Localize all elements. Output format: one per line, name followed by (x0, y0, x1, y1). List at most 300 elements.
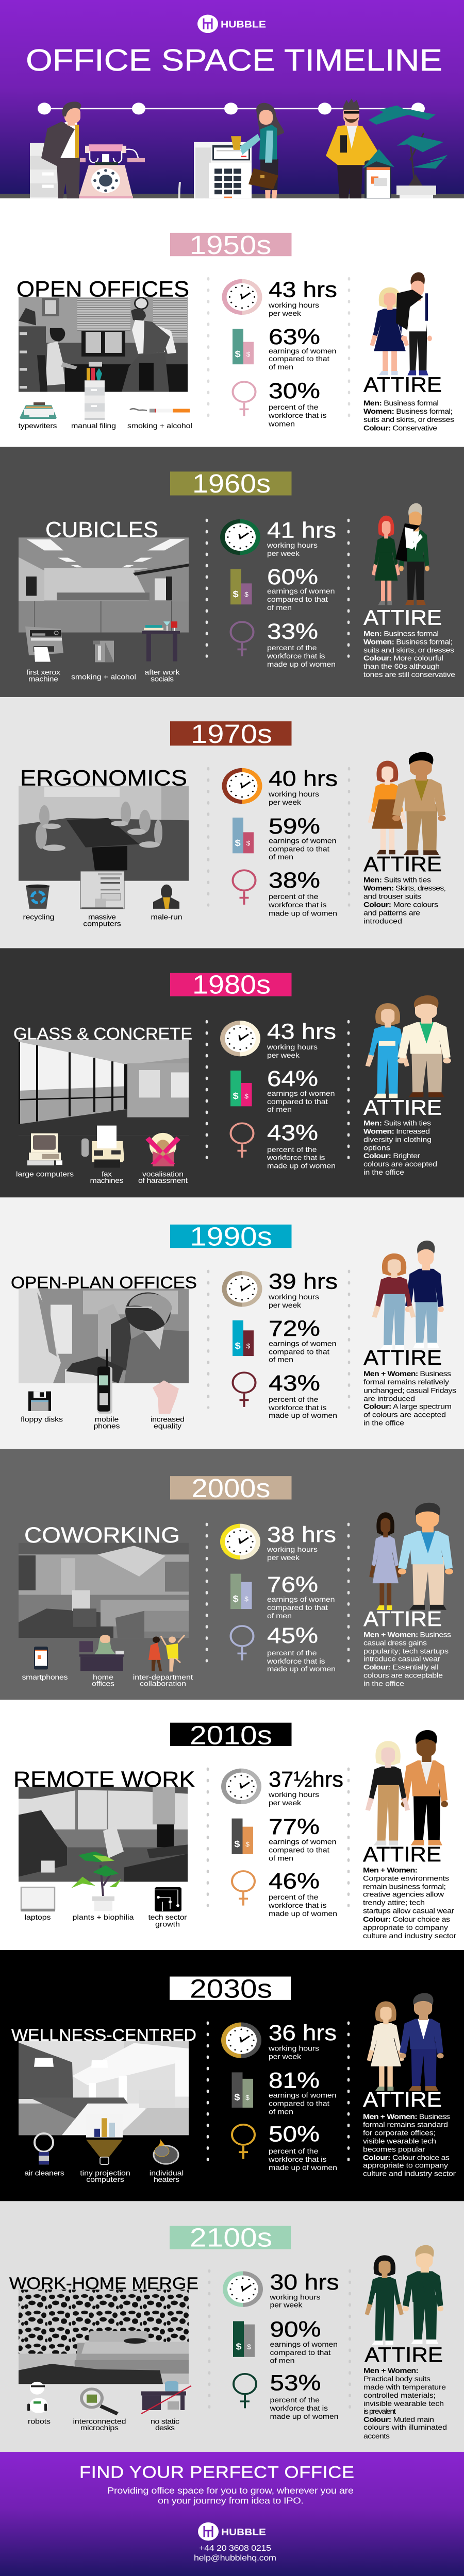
stat: earnings bar: earnings of women (269, 2091, 336, 2099)
divider dots (348, 768, 350, 906)
divider dots (207, 2022, 209, 2161)
stat: earnings bar: compared to that (269, 355, 330, 363)
stat: women in workforce: percent of the (269, 893, 319, 901)
stat: earnings bar: 59% (269, 814, 320, 838)
stat: earnings bar: of men (269, 363, 293, 371)
stat: earnings bar: 72% (269, 1316, 320, 1341)
icon with label: robot: robots (28, 2417, 51, 2426)
stat: women in workforce: 43% (267, 1121, 318, 1145)
heading: OPEN OFFICES (16, 277, 189, 301)
stat: women in workforce (233, 868, 337, 918)
decade badge: 1970s (170, 720, 292, 749)
icon with label: first xerox machine (25, 626, 63, 683)
stat: earnings bar: earnings of women (269, 347, 336, 355)
panel: footer (0, 2452, 464, 2576)
icon with label: circuit board: growth (155, 1920, 180, 1928)
attire description: Corporate environments (363, 1874, 449, 1883)
logo: Hubble: HUBBLE (221, 2527, 266, 2538)
icon with label: circuit board: tech sector (148, 1913, 187, 1922)
icon with label: recycling bin (23, 885, 54, 921)
attire description: visible wearable tech (363, 2137, 436, 2145)
stat: earnings bar (230, 565, 335, 612)
attire description: Men + Women: (363, 2367, 419, 2375)
stat: working hours: working hours (267, 541, 318, 550)
stat: working hours: working hours (268, 301, 319, 310)
attire description: in the office (363, 1680, 404, 1688)
panel: 1950s (0, 198, 464, 447)
stat: earnings bar: of men (267, 1612, 292, 1620)
attire description: are introduced (363, 1395, 415, 1403)
stat: earnings bar: $ (233, 1594, 239, 1604)
decade badge: 2100s (170, 2223, 291, 2252)
stat: women in workforce: made up of women (269, 1412, 337, 1420)
icon with label: laptop: laptops (25, 1913, 51, 1922)
decade badge: 2010s (170, 1721, 292, 1750)
stat: working hours (220, 1522, 336, 1562)
icon with label: tiny projection computer (80, 2114, 130, 2184)
stat: earnings bar: 76% (267, 1572, 318, 1597)
stat: women in workforce (234, 2370, 338, 2421)
attire description: and trouser suits (363, 892, 421, 901)
stat: women in workforce (232, 1869, 337, 1918)
photo: older man at a computer (19, 1289, 189, 1383)
stat: working hours: working hours (268, 1293, 319, 1301)
attire description (363, 2113, 456, 2178)
stat: earnings bar: earnings of women (269, 1838, 336, 1846)
stat: working hours: per week (270, 2301, 303, 2310)
stat: earnings bar: compared to that (269, 1846, 330, 1854)
stat: earnings bar: earnings of women (267, 1090, 335, 1098)
stat: women in workforce: made up of women (269, 909, 337, 918)
attire description: invisible wearable tech (363, 2400, 444, 2408)
stat: earnings bar: 63% (269, 324, 320, 349)
stat: earnings bar: $ (235, 838, 241, 849)
decade badge: 1970s: 1970s (191, 720, 272, 749)
stat: women in workforce: workforce that is (267, 1657, 325, 1666)
stat: women in workforce: made up of women (269, 1910, 337, 1918)
figures: 1980s attire (366, 995, 451, 1098)
figures: 2100s attire (365, 2245, 443, 2345)
heading: ERGONOMICS (20, 766, 187, 790)
attire description: Colour: More colours (363, 901, 438, 909)
icon with label: dancing colleagues: inter-department (133, 1673, 193, 1682)
divider dots (207, 1769, 209, 1906)
stat: women in workforce: 46% (269, 1869, 320, 1893)
icon with label: crossed-out desk: no static (151, 2417, 179, 2426)
stat: women in workforce: 38% (269, 868, 320, 892)
icon with label: dancing colleagues: collaboration (140, 1680, 186, 1688)
stat: earnings bar: compared to that (267, 596, 328, 604)
attire description: in the office (363, 1168, 404, 1177)
attire description: in the office (363, 1419, 404, 1427)
attire description: remain business formal; (363, 1883, 446, 1891)
attire description: introduce casual wear (363, 1655, 440, 1663)
icon with label: crossed arms (138, 1133, 188, 1185)
heading: COWORKING (24, 1523, 180, 1548)
decade badge: 1980s: 1980s (192, 970, 271, 999)
stat: earnings bar: $ (246, 1343, 251, 1350)
stat: working hours: 39 hrs (269, 1269, 338, 1294)
stat: working hours: 30 hrs (270, 2270, 339, 2294)
attire description: culture and industry sector (363, 1932, 456, 1940)
stat: women in workforce (231, 1121, 336, 1170)
attire description: introduced (363, 917, 402, 925)
stat: earnings bar: $ (245, 1841, 250, 1848)
heading: WORK-HOME MERGE (9, 2275, 198, 2293)
stat: earnings bar: earnings of women (267, 587, 335, 596)
stat: earnings bar: earnings of women (267, 1596, 335, 1604)
divider dots (348, 278, 350, 417)
divider dots (206, 1021, 208, 1158)
stat: women in workforce: 33% (267, 619, 318, 643)
panel: 1990s (0, 1197, 464, 1449)
stat: women in workforce: made up of women (267, 1665, 336, 1673)
attire description: of colours are accepted (363, 1411, 446, 1419)
attire description: Colour: More colourful (363, 654, 443, 663)
icon with label: magnifier over microchip: interconnected (73, 2417, 126, 2426)
attire description: Men + Women: (363, 1866, 418, 1874)
stat: working hours: working hours (267, 1546, 318, 1554)
icon with label: tiny projection computer: computers (86, 2176, 124, 2184)
stat: women in workforce (231, 619, 336, 669)
stat: working hours: working hours (268, 2044, 319, 2053)
decade badge: 2010s: 2010s (190, 1721, 272, 1750)
decade badge: 2000s: 2000s (192, 1474, 271, 1503)
stat: women in workforce: percent of the (269, 1893, 319, 1902)
heading: WELLNESS-CENTRED (11, 2026, 196, 2045)
decade badge: 1950s (170, 231, 292, 260)
figures: 1950s attire (370, 272, 432, 375)
icon with label: raised fist: increased (151, 1415, 185, 1423)
stat: earnings bar: of men (269, 1854, 293, 1862)
stat: women in workforce: percent of the (267, 1146, 317, 1154)
logo: Hubble: HUBBLE (221, 19, 266, 30)
stat: earnings bar: of men (270, 2357, 295, 2365)
icon: potted plant (362, 106, 448, 212)
figures: 2000s attire (369, 1503, 453, 1610)
icon with label: male silhouette (151, 885, 183, 921)
attire description: Men + Women: Business (363, 1631, 451, 1639)
heading: attire: ATTIRE (363, 1346, 442, 1369)
stat: women in workforce (233, 378, 327, 428)
stat: working hours (222, 277, 337, 318)
attire description: startups allow casual wear (363, 1907, 454, 1916)
icon with label: fax machine: fax (102, 1170, 112, 1178)
icon with label: raised fist: equality (154, 1422, 181, 1430)
icon with label: raised fist (151, 1380, 185, 1430)
icon with label: circuit board (148, 1887, 187, 1928)
attire description: Men + Women: Business (363, 2113, 450, 2121)
stat: working hours: per week (269, 799, 301, 807)
attire description: Colour: Essentially all (363, 1663, 438, 1671)
icon with label: typewriter: typewriters (19, 422, 57, 430)
stat: working hours: 41 hrs (267, 518, 336, 543)
icon with label: massive computer: massive (88, 913, 116, 921)
stat: working hours: 36 hrs (269, 2021, 337, 2045)
stat: working hours: working hours (267, 1043, 318, 1052)
stat: women in workforce: made up of women (269, 2164, 337, 2172)
stat: earnings bar: $ (244, 1093, 249, 1100)
decade badge: 1950s: 1950s (190, 231, 272, 260)
divider dots (207, 768, 209, 906)
icon with label: after work drinks table (142, 621, 180, 683)
stat: working hours: per week (269, 1301, 301, 1310)
stat: women in workforce: 50% (269, 2122, 320, 2146)
decade badge: 1960s: 1960s (192, 469, 271, 499)
stat: earnings bar: $ (246, 840, 251, 847)
attire description: culture and industry sector (363, 2170, 456, 2178)
figure: man with jacket over shoulder (41, 101, 81, 215)
panel: header (0, 0, 464, 216)
stat: women in workforce: workforce that is (267, 1154, 325, 1162)
stat: earnings bar: compared to that (269, 1348, 330, 1356)
stat: earnings bar: $ (246, 351, 251, 358)
stat: earnings bar (232, 1814, 336, 1862)
attire description: Women: Business formal; (363, 638, 453, 646)
decade badge: 2030s (170, 1974, 291, 2004)
stat: working hours (223, 2270, 339, 2309)
stat: women in workforce: percent of the (270, 2396, 320, 2404)
attire description: Men: Business formal (363, 630, 439, 638)
stat: women in workforce: workforce that is (267, 652, 325, 660)
stat: working hours (221, 1767, 343, 1807)
stat: earnings bar: $ (236, 2342, 242, 2352)
icon with label: robot (27, 2382, 51, 2426)
stat: working hours: per week (269, 1799, 301, 1807)
stat: women in workforce: made up of women (267, 1162, 336, 1170)
stat: women in workforce: percent of the (267, 644, 317, 652)
icon with label: crossed-out desk: desks (155, 2424, 175, 2432)
icon with label: massive computer (80, 871, 124, 928)
stat: earnings bar: $ (244, 1596, 249, 1603)
stat: earnings bar: earnings of women (270, 2341, 338, 2349)
photo: glass-walled home workspace (19, 1787, 188, 1882)
figures: 1970s attire (368, 752, 446, 855)
attire description: is prevalent (363, 2408, 396, 2416)
attire description: Women: Increased (363, 1127, 430, 1136)
icon: office desk phone (175, 142, 252, 215)
stat: earnings bar (230, 1572, 335, 1620)
decade badge: 1990s: 1990s (190, 1223, 272, 1251)
heading: GLASS & CONCRETE (13, 1025, 192, 1043)
attire description: casual dress gains (363, 1639, 427, 1647)
stat: working hours: per week (269, 310, 301, 318)
decade badge: 2100s: 2100s (190, 2223, 272, 2252)
icon with label: first xerox machine: machine (28, 675, 58, 683)
stat: working hours: 40 hrs (269, 766, 338, 791)
stat: women in workforce: workforce that is (269, 2404, 328, 2413)
panel: 1960s (0, 447, 464, 697)
stat: women in workforce: percent of the (267, 1649, 317, 1657)
icon with label: fax machine: machines (90, 1177, 124, 1185)
stat: working hours: working hours (268, 790, 319, 799)
attire description: colours are acceptable (363, 1671, 443, 1680)
figures: 2010s attire (366, 1730, 448, 1845)
attire description (363, 1631, 451, 1688)
attire description: popularity; tech startups (363, 1647, 449, 1655)
panel: 2000s (0, 1449, 464, 1700)
heading: call to action: FIND YOUR PERFECT OFFICE (79, 2463, 354, 2482)
stat: women in workforce: 43% (269, 1370, 320, 1395)
stat: women in workforce: workforce that is (268, 1404, 327, 1412)
stat: earnings bar: 81% (269, 2068, 320, 2093)
icon with label: crossed-out desk (141, 2381, 191, 2432)
attire description: Women: Skirts, dresses, (363, 884, 446, 892)
icon with label: crossed arms: vocalisation (142, 1170, 184, 1178)
divider dots (349, 2270, 351, 2408)
attire description: formal remains standard (363, 2121, 448, 2129)
stat: earnings bar: compared to that (267, 1604, 328, 1612)
stat: working hours: per week (267, 550, 300, 558)
decade badge: 1980s (170, 970, 292, 999)
icon with label: first xerox machine: first xerox (26, 668, 60, 676)
stat: women in workforce: made up of women (267, 660, 336, 669)
icon with label: potted plant (71, 1852, 134, 1922)
icon with label: cigarette (127, 409, 192, 430)
attire description: diversity in clothing (363, 1136, 432, 1144)
stat: earnings bar: compared to that (270, 2349, 331, 2357)
icon with label: home office desk: offices (92, 1680, 114, 1688)
icon with label: fax machine (81, 1126, 124, 1185)
attire description: tones are still conservative (363, 671, 455, 679)
stat: women in workforce: 30% (269, 378, 320, 403)
contact details (194, 2544, 276, 2563)
panel: 1980s (0, 948, 464, 1197)
divider dots (347, 1524, 350, 1662)
figures: 2030s attire (367, 1993, 444, 2091)
stat: working hours: per week (267, 1554, 300, 1562)
attire description: made with temperature (363, 2383, 446, 2392)
photo: coworking lounge (19, 1543, 189, 1638)
icon with label: tiny projection computer: tiny projection (80, 2169, 130, 2177)
stat: earnings bar: compared to that (269, 845, 330, 853)
stat: women in workforce: women (268, 420, 295, 428)
attire description: suits and skirts, or dresses (363, 646, 454, 654)
icon with label: magnifier over microchip: microchips (80, 2424, 119, 2432)
icon with label: male silhouette: male-run (151, 913, 183, 921)
stat: working hours (222, 1269, 338, 1310)
decade badge: 1960s (170, 469, 292, 499)
icon with label: potted plant: plants + biophilia (72, 1913, 134, 1922)
contact details: help@hubblehq.com (194, 2553, 276, 2563)
icon: filing cabinet (30, 143, 59, 213)
stat: earnings bar (230, 1066, 335, 1114)
logo: Hubble (198, 2522, 266, 2541)
stat: earnings bar: compared to that (267, 1098, 328, 1106)
stat: working hours: 37½hrs (269, 1767, 343, 1792)
stat: earnings bar: of men (269, 1355, 293, 1364)
attire description: Men + Women: Business (363, 1370, 451, 1378)
icon with label: hip flask (71, 641, 136, 681)
decade badge: 2000s (170, 1474, 292, 1503)
icon with label: hip flask: smoking + alcohol (71, 673, 136, 681)
stat: working hours: per week (267, 1052, 300, 1060)
icon with label: filing cabinet with stationery: manual filing (71, 422, 116, 430)
divider dots (206, 1524, 208, 1662)
decade badge: 2030s: 2030s (190, 1974, 272, 2004)
stat: earnings bar (232, 2068, 336, 2116)
icon with label: dancing colleagues (133, 1635, 193, 1688)
icon with label: smartphone: smartphones (22, 1673, 68, 1682)
stat: earnings bar: 60% (267, 565, 318, 589)
heading: attire: ATTIRE (363, 2088, 442, 2112)
divider dots (207, 1271, 209, 1408)
stat: working hours: working hours (269, 2293, 321, 2301)
attire description: colours with illuminated (363, 2424, 447, 2432)
photo: typist and boss in a 1950s office (19, 297, 188, 392)
icon with label: typewriter (19, 402, 57, 430)
photo: cubicle office (19, 537, 189, 633)
panel: 2010s (0, 1700, 464, 1950)
attire description: Colour: Colour choice as (363, 2154, 450, 2162)
divider dots (207, 278, 209, 417)
attire description (363, 1370, 456, 1427)
attire description: appropriate to company (363, 2161, 448, 2170)
stat: earnings bar: of men (267, 604, 292, 612)
stat: earnings bar: $ (234, 1839, 240, 1849)
stat: working hours: 43 hrs (267, 1019, 336, 1044)
icon with label: recycling bin: recycling (23, 913, 54, 921)
logo: Hubble (197, 14, 266, 33)
heading: CUBICLES (45, 517, 158, 542)
icon with label: floppy disk (21, 1392, 63, 1423)
icon with label: heater ring: heaters (154, 2176, 179, 2184)
stat: women in workforce: percent of the (269, 1396, 319, 1404)
stat: earnings bar: $ (233, 589, 239, 600)
icon with label: air cleaner (24, 2133, 64, 2177)
divider dots (347, 1021, 350, 1158)
attire description: Women: Business formal; (363, 408, 453, 416)
icon with label: heater ring: individual (150, 2169, 184, 2177)
heading: REMOTE WORK (13, 1767, 195, 1792)
stat: earnings bar: $ (235, 1341, 241, 1351)
contact details: +44 20 3608 0215 (199, 2544, 271, 2553)
stat: earnings bar: $ (244, 591, 249, 598)
heading: OPEN-PLAN OFFICES (11, 1274, 197, 1292)
stat: earnings bar: earnings of women (269, 837, 336, 845)
stat: working hours: 43 hrs (269, 277, 337, 302)
icon with label: laptop (21, 1887, 55, 1922)
icon with label: brick mobile phone (93, 1349, 120, 1430)
icon with label: cigarette: smoking + alcohol (127, 422, 192, 430)
divider dots (208, 2270, 210, 2408)
stat: earnings bar: 64% (267, 1066, 318, 1091)
icon with label: home office desk: home (93, 1673, 113, 1682)
attire description (363, 399, 454, 432)
attire description: creative agencies allow (363, 1891, 444, 1899)
stat: earnings bar: $ (235, 349, 241, 360)
attire description: options (363, 1144, 390, 1152)
photo: bedroom with organic screen wall (19, 2290, 189, 2384)
stat: earnings bar: of men (269, 2108, 293, 2116)
icon with label: after work drinks table: after work (144, 668, 180, 676)
attire description: becomes popular (363, 2145, 425, 2154)
icon with label: smartphone (22, 1647, 68, 1682)
figures: 1990s attire (372, 1241, 444, 1350)
stat: earnings bar: compared to that (269, 2099, 330, 2108)
heading: attire: ATTIRE (364, 2344, 443, 2367)
attire description: Men: Suits with ties (363, 1119, 431, 1127)
stat: earnings bar: 77% (269, 1814, 320, 1839)
decade badge: 1990s (170, 1223, 292, 1251)
heading: attire: ATTIRE (363, 1096, 442, 1120)
photo: meeting room with oval chairs (19, 786, 189, 881)
attire description: Colour: Conservative (363, 424, 437, 432)
icon: smartphone (364, 160, 391, 205)
heading: attire: ATTIRE (363, 606, 442, 630)
stat: working hours (220, 518, 336, 558)
divider dots (348, 1271, 350, 1408)
